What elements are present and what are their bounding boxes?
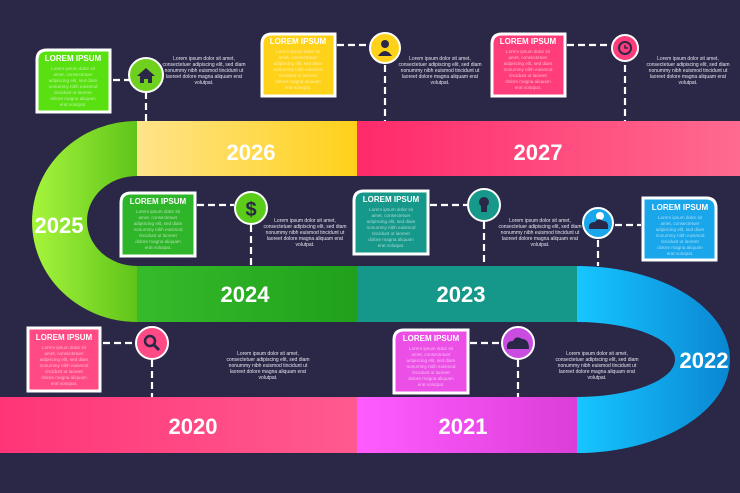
band 2021 [357, 397, 577, 453]
text 2026: Lorem ipsum dolor sit amet, [173, 56, 235, 62]
card: 2022 blue: nonummy nibh euismod [656, 233, 705, 238]
card: 2023 teal [354, 191, 428, 254]
card: 2020 pink: Lorem ipsum dolor sit [42, 345, 87, 350]
card: 2020 pink: dolore magna aliquam [41, 375, 87, 380]
card: 2026 green: tincidunt ut laoreet [54, 90, 92, 95]
card: 2027 yellow [262, 34, 335, 96]
band 2026: 2026 [227, 140, 275, 165]
text 2024 [263, 218, 347, 248]
card: 2027 yellow: nonummy nibh euismod [274, 67, 323, 72]
card: 2024 green: LOREM IPSUM [130, 197, 187, 206]
card: 2022 blue: tincidunt ut laoreet [661, 239, 699, 244]
card: 2021 magenta: dolore magna aliquam [408, 376, 454, 381]
icon: cloud [502, 327, 534, 359]
road: left curve 2025 [32, 121, 137, 322]
card: 2021 magenta: nonummy nibh euismod [407, 364, 456, 369]
icon: user [370, 33, 400, 63]
icon: clock [612, 35, 638, 61]
card: 2022 blue [643, 198, 716, 260]
card: 2024 green: tincidunt ut laoreet [139, 233, 177, 238]
text 2020: Lorem ipsum dolor sit amet, [237, 351, 299, 357]
card: 2027 yellow: tincidunt ut laoreet [279, 73, 317, 78]
card: pink top: dolore magna aliquam [505, 79, 551, 84]
card: 2022 blue: amet, consectetuer [660, 221, 700, 226]
card: 2027 yellow: amet, consectetuer [278, 55, 318, 60]
text 2024: volutpat. [296, 242, 314, 248]
card: pink top: erat volutpat. [515, 85, 541, 90]
card: 2024 green: dolore magna aliquam [135, 239, 181, 244]
card: pink top: Lorem ipsum dolor sit [506, 49, 551, 54]
band 2027 [357, 121, 740, 176]
card: 2026 green: Lorem ipsum dolor sit [51, 66, 96, 71]
card: 2023 teal: Lorem ipsum dolor sit [369, 207, 414, 212]
icon: dollar: $ [245, 199, 257, 221]
card: 2024 green: nonummy nibh euismod [134, 227, 183, 232]
text 2026: consectetuer adipiscing elit, sed diam [162, 62, 246, 68]
card: 2026 green: dolore magna aliquam [50, 96, 96, 101]
icon: cloud sun [583, 208, 613, 238]
card: 2023 teal: tincidunt ut laoreet [372, 231, 410, 236]
card: pink top [492, 34, 565, 96]
icon: dollar [235, 192, 267, 224]
card: pink top: adipiscing elit, sed diam [504, 61, 553, 66]
text pink top: Lorem ipsum dolor sit amet, [657, 56, 719, 62]
text 2021: laoreet dolore magna aliquam erat [559, 369, 636, 375]
card: 2023 teal: adipiscing elit, sed diam [367, 219, 416, 224]
card: 2023 teal: amet, consectetuer [371, 213, 411, 218]
card: 2020 pink: LOREM IPSUM [36, 333, 93, 342]
card: 2020 pink: amet, consectetuer [44, 351, 84, 356]
card: 2026 green: LOREM IPSUM [45, 54, 102, 63]
card: 2024 green: amet, consectetuer [138, 215, 178, 220]
card: 2022 blue: adipiscing elit, sed diam [656, 227, 705, 232]
card: 2020 pink [28, 328, 100, 391]
icon: search [136, 327, 168, 359]
card: 2023 teal: dolore magna aliquam [368, 237, 414, 242]
card: 2027 yellow: adipiscing elit, sed diam [274, 61, 323, 66]
band 2023: 2023 [437, 282, 485, 307]
card: 2023 teal: erat volutpat. [378, 243, 404, 248]
card: 2020 pink: adipiscing elit, sed diam [40, 357, 89, 362]
text 2023: consectetuer adipiscing elit, sed diam [498, 224, 582, 230]
text 2027: Lorem ipsum dolor sit amet, [409, 56, 471, 62]
card: 2022 blue: erat volutpat. [667, 251, 693, 256]
text 2026: volutpat. [195, 80, 213, 86]
road: right curve 2022 [577, 266, 730, 453]
text 2024: laoreet dolore magna aliquam erat [267, 236, 344, 242]
text 2024: consectetuer adipiscing elit, sed diam [263, 224, 347, 230]
card: 2020 pink: nonummy nibh euismod [40, 363, 89, 368]
card: 2021 magenta: amet, consectetuer [411, 352, 451, 357]
card: 2026 green: erat volutpat. [60, 102, 86, 107]
text 2023: Lorem ipsum dolor sit amet, [509, 218, 571, 224]
card: 2026 green: adipiscing elit, sed diam [49, 78, 98, 83]
text 2024: nonummy nibh euismod tincidunt ut [266, 230, 345, 236]
card: 2026 green: amet, consectetuer [53, 72, 93, 77]
text 2026: laoreet dolore magna aliquam erat [166, 74, 243, 80]
band 2024 [137, 266, 357, 322]
text 2026: nonummy nibh euismod tincidunt ut [165, 68, 244, 74]
text 2027 [398, 56, 482, 86]
band 2026 [137, 121, 357, 176]
text 2021: volutpat. [588, 375, 606, 381]
card: 2024 green [121, 193, 195, 256]
card: 2021 magenta: adipiscing elit, sed diam [407, 358, 456, 363]
card: 2026 green: nonummy nibh euismod [49, 84, 98, 89]
text pink top: nonummy nibh euismod tincidunt ut [649, 68, 728, 74]
card: 2027 yellow: erat volutpat. [285, 85, 311, 90]
card: 2022 blue: Lorem ipsum dolor sit [658, 215, 703, 220]
dashed connectors [103, 45, 641, 397]
text 2021: consectetuer adipiscing elit, sed diam [555, 357, 639, 363]
card: 2022 blue: LOREM IPSUM [652, 203, 709, 212]
card: pink top: amet, consectetuer [508, 55, 548, 60]
text 2026 [162, 56, 246, 86]
text 2023: nonummy nibh euismod tincidunt ut [501, 230, 580, 236]
text 2021: nonummy nibh euismod tincidunt ut [558, 363, 637, 369]
card: 2021 magenta: tincidunt ut laoreet [412, 370, 450, 375]
text 2027: volutpat. [431, 80, 449, 86]
road: left curve 2025: 2025 [35, 213, 83, 238]
text 2021 [555, 351, 639, 381]
card: 2021 magenta: LOREM IPSUM [403, 334, 460, 343]
card: 2024 green: Lorem ipsum dolor sit [136, 209, 181, 214]
icon: bulb [468, 189, 500, 221]
text pink top: volutpat. [679, 80, 697, 86]
card: pink top: tincidunt ut laoreet [509, 73, 547, 78]
text 2027: nonummy nibh euismod tincidunt ut [401, 68, 480, 74]
text pink top: consectetuer adipiscing elit, sed diam [646, 62, 730, 68]
card: pink top: LOREM IPSUM [500, 37, 557, 46]
text 2023: laoreet dolore magna aliquam erat [502, 236, 579, 242]
text 2020: consectetuer adipiscing elit, sed diam [226, 357, 310, 363]
card: 2024 green: erat volutpat. [145, 245, 171, 250]
card: 2023 teal: nonummy nibh euismod [367, 225, 416, 230]
band 2020 [0, 397, 357, 453]
text 2023: volutpat. [531, 242, 549, 248]
band 2024: 2024 [221, 282, 270, 307]
card: 2021 magenta [394, 330, 468, 393]
card: 2021 magenta: Lorem ipsum dolor sit [409, 346, 454, 351]
text 2020: volutpat. [259, 375, 277, 381]
card: 2023 teal: LOREM IPSUM [363, 195, 420, 204]
text pink top [646, 56, 730, 86]
text 2020: nonummy nibh euismod tincidunt ut [229, 363, 308, 369]
band 2020: 2020 [169, 414, 217, 439]
text 2020: laoreet dolore magna aliquam erat [230, 369, 307, 375]
card: 2024 green: adipiscing elit, sed diam [134, 221, 183, 226]
band 2021: 2021 [439, 414, 487, 439]
text 2027: laoreet dolore magna aliquam erat [402, 74, 479, 80]
card: 2022 blue: dolore magna aliquam [657, 245, 703, 250]
text 2027: consectetuer adipiscing elit, sed diam [398, 62, 482, 68]
text 2023 [498, 218, 582, 248]
card: 2027 yellow: LOREM IPSUM [270, 37, 327, 46]
band 2027: 2027 [514, 140, 562, 165]
card: 2020 pink: tincidunt ut laoreet [45, 369, 83, 374]
card: 2021 magenta: erat volutpat. [418, 382, 444, 387]
text 2020 [226, 351, 310, 381]
card: 2027 yellow: dolore magna aliquam [275, 79, 321, 84]
text 2021: Lorem ipsum dolor sit amet, [566, 351, 628, 357]
card: 2026 green [37, 50, 110, 112]
card: 2027 yellow: Lorem ipsum dolor sit [276, 49, 321, 54]
text pink top: laoreet dolore magna aliquam erat [650, 74, 727, 80]
text 2024: Lorem ipsum dolor sit amet, [274, 218, 336, 224]
card: 2020 pink: erat volutpat. [51, 381, 77, 386]
band 2023 [357, 266, 577, 322]
card: pink top: nonummy nibh euismod [504, 67, 553, 72]
road: right curve 2022: 2022 [680, 348, 728, 373]
icon: home [129, 58, 163, 92]
